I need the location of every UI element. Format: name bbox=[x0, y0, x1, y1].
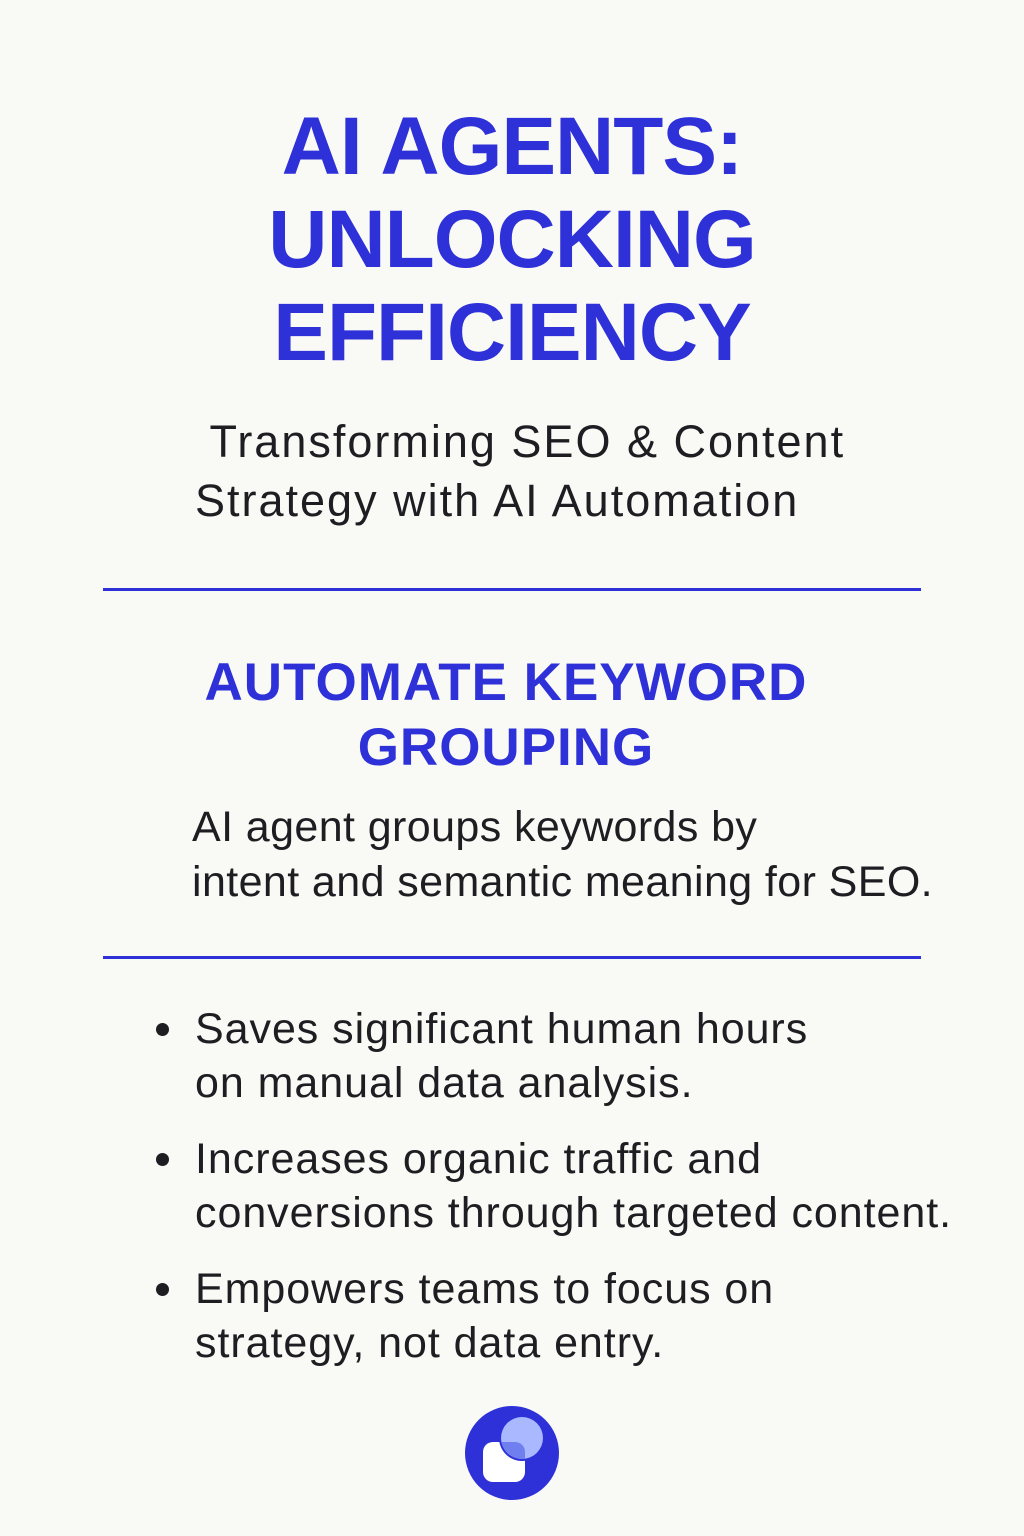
section heading: GROUPING bbox=[358, 718, 654, 777]
description: intent and semantic meaning for SEO. bbox=[192, 858, 933, 906]
icon: logo bbox=[465, 1406, 559, 1500]
bullet 1 bbox=[156, 1005, 808, 1107]
title: AI AGENTS: bbox=[282, 101, 742, 192]
title: UNLOCKING bbox=[268, 194, 756, 285]
subtitle bbox=[195, 416, 845, 526]
subtitle: Strategy with AI Automation bbox=[195, 475, 799, 526]
bullet list bbox=[156, 1005, 952, 1367]
bullet 2 bbox=[156, 1135, 952, 1237]
title: EFFICIENCY bbox=[273, 287, 751, 378]
bullet 2: conversions through targeted content. bbox=[195, 1189, 952, 1237]
section heading bbox=[205, 653, 807, 777]
description: AI agent groups keywords by bbox=[192, 803, 757, 851]
bullet 1: on manual data analysis. bbox=[195, 1059, 694, 1107]
bullet 2: Increases organic traffic and bbox=[195, 1135, 762, 1183]
bullet 3 bbox=[156, 1265, 774, 1367]
title bbox=[268, 101, 756, 378]
bullet 3: Empowers teams to focus on bbox=[195, 1265, 774, 1313]
bullet 1: Saves significant human hours bbox=[195, 1005, 808, 1053]
subtitle: Transforming SEO & Content bbox=[210, 416, 845, 467]
description bbox=[192, 803, 933, 906]
bullet 3: strategy, not data entry. bbox=[195, 1319, 664, 1367]
section heading: AUTOMATE KEYWORD bbox=[205, 653, 807, 712]
